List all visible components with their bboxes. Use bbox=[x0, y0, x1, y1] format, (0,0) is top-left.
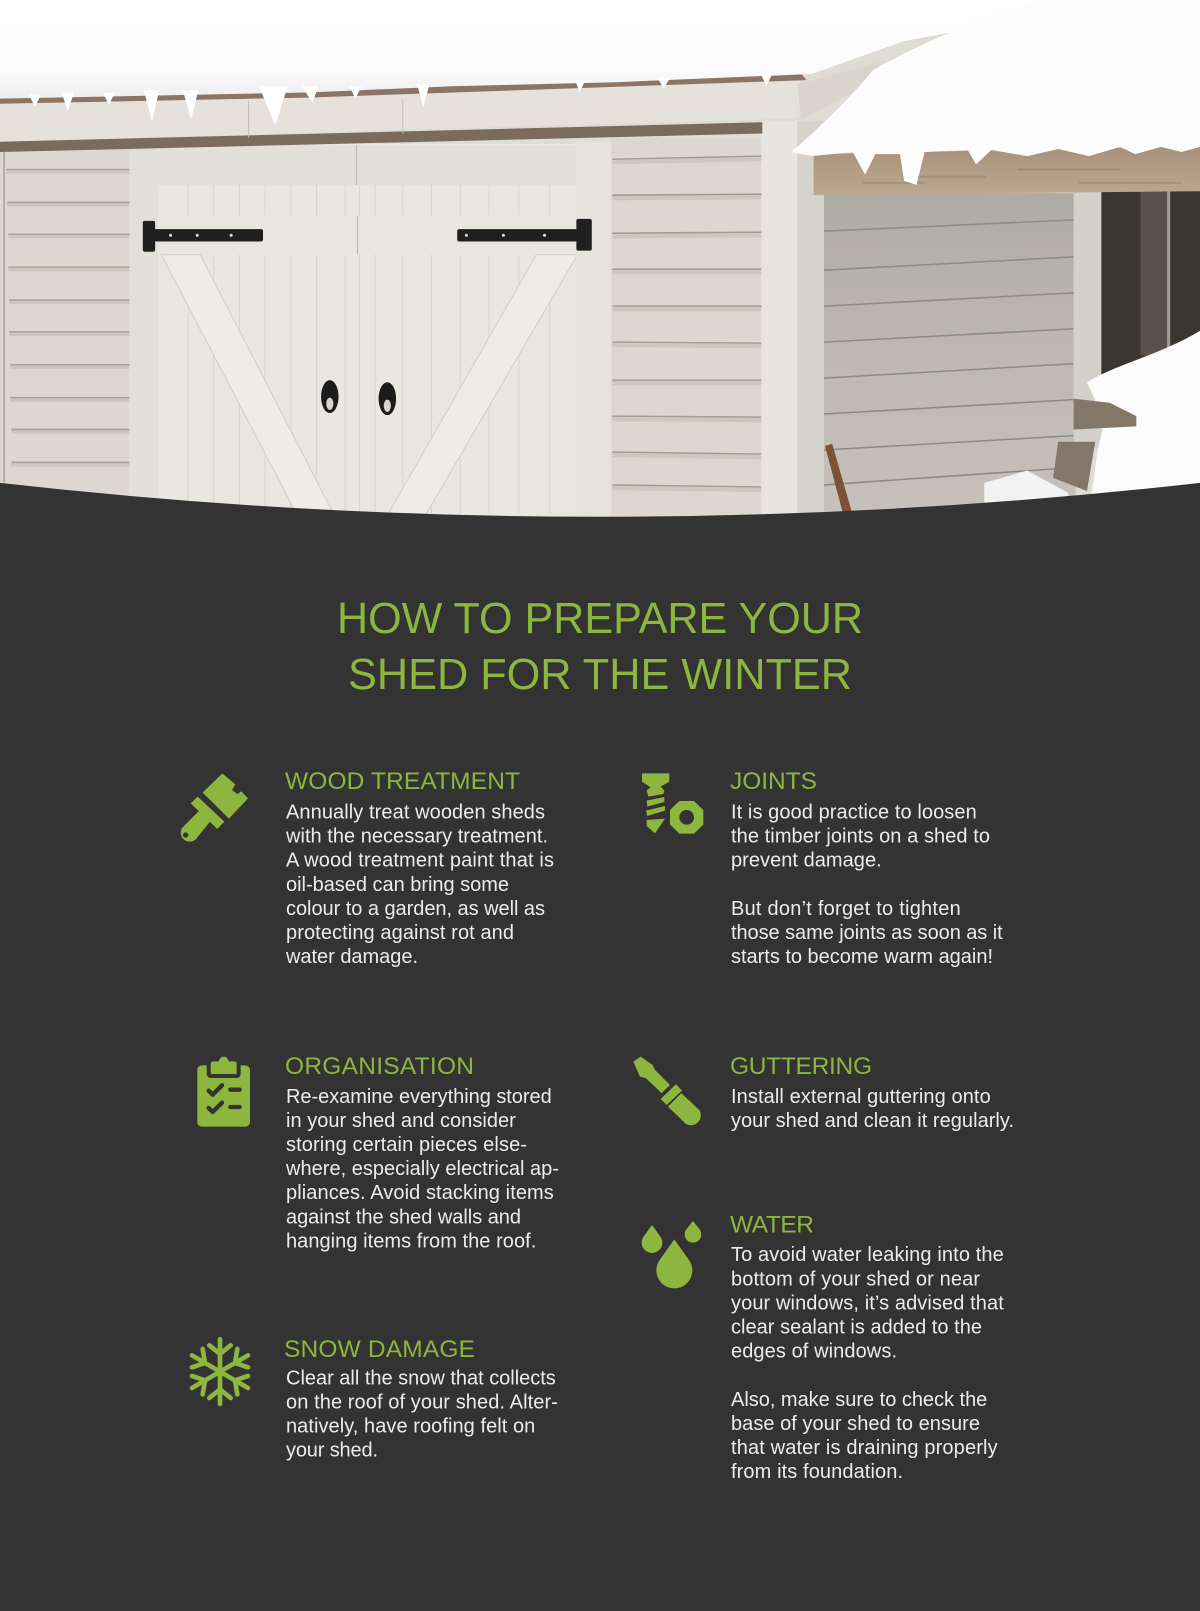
section: joints: It is good practice to loosen bbox=[731, 802, 977, 824]
icon: water drops bbox=[642, 1221, 701, 1288]
section: wood treatment: water damage. bbox=[285, 946, 418, 968]
section: guttering bbox=[730, 1053, 1014, 1132]
section: snow damage bbox=[284, 1336, 558, 1462]
title: SHED FOR THE WINTER bbox=[348, 651, 852, 699]
side wall bbox=[824, 193, 1076, 514]
section: joints: But don’t forget to tighten bbox=[731, 898, 961, 920]
section: organisation: ORGANISATION bbox=[285, 1053, 474, 1080]
section: organisation: pliances. Avoid stacking items bbox=[286, 1182, 554, 1204]
section: wood treatment: Annually treat wooden sheds bbox=[286, 802, 545, 824]
section: snow damage: on the roof of your shed. Alter- bbox=[286, 1392, 558, 1414]
section: water: edges of windows. bbox=[731, 1341, 897, 1363]
front roof snow bbox=[791, 0, 1200, 185]
section: snow damage: Clear all the snow that collects bbox=[286, 1367, 556, 1389]
icon: screw and nut bbox=[642, 773, 703, 834]
dark doorway bbox=[1101, 191, 1200, 397]
snow on ground bbox=[984, 471, 1068, 509]
section: organisation: against the shed walls and bbox=[286, 1206, 521, 1228]
section: water: WATER bbox=[730, 1211, 814, 1238]
icon: paint brush bbox=[181, 773, 248, 842]
side post bbox=[1074, 191, 1101, 448]
left siding bbox=[0, 149, 135, 519]
left door post bbox=[129, 151, 161, 511]
section: water: base of your shed to ensure bbox=[731, 1413, 980, 1435]
section: wood treatment: A wood treatment paint that is bbox=[286, 850, 554, 872]
double doors bbox=[156, 144, 579, 516]
section: joints: those same joints as soon as it bbox=[731, 922, 1003, 944]
section: water bbox=[730, 1211, 1004, 1483]
section: water: your windows, it’s advised that bbox=[731, 1292, 1004, 1314]
section: joints bbox=[730, 768, 1003, 968]
section: water: that water is draining properly bbox=[731, 1437, 998, 1459]
snow pile lower right bbox=[1087, 331, 1200, 514]
stick bbox=[825, 444, 852, 512]
section: organisation: storing certain pieces else- bbox=[286, 1134, 527, 1156]
curved bottom edge bbox=[0, 483, 1200, 534]
icon: clipboard bbox=[197, 1057, 250, 1127]
section: water: To avoid water leaking into the bbox=[731, 1244, 1004, 1266]
section: snow damage: natively, have roofing felt on bbox=[286, 1416, 535, 1438]
photo: snow-covered wooden shed bbox=[0, 0, 1200, 534]
section: wood treatment: WOOD TREATMENT bbox=[285, 768, 520, 795]
section: organisation: hanging items from the roof. bbox=[286, 1230, 536, 1252]
icon: snowflake bbox=[192, 1339, 248, 1404]
door handles bbox=[321, 380, 396, 415]
section: wood treatment: colour to a garden, as well as bbox=[286, 898, 545, 920]
section: snow damage: SNOW DAMAGE bbox=[284, 1336, 475, 1363]
section: guttering: GUTTERING bbox=[730, 1053, 872, 1080]
section: guttering: your shed and clean it regularly. bbox=[731, 1110, 1014, 1132]
section: wood treatment: with the necessary treatment. bbox=[285, 826, 548, 848]
centre siding bbox=[611, 138, 764, 518]
section: organisation: where, especially electrical ap- bbox=[285, 1158, 559, 1180]
section: water: clear sealant is added to the bbox=[731, 1316, 982, 1338]
roof edge bbox=[0, 74, 807, 104]
section: wood treatment: oil-based can bring some bbox=[286, 874, 509, 896]
section: joints: JOINTS bbox=[730, 768, 817, 795]
door post right bbox=[576, 142, 611, 517]
icicles bbox=[29, 73, 773, 125]
section: wood treatment bbox=[285, 768, 554, 968]
section: water: bottom of your shed or near bbox=[731, 1268, 980, 1290]
title: HOW TO PREPARE YOUR bbox=[337, 595, 863, 643]
section: guttering: Install external guttering onto bbox=[731, 1086, 991, 1108]
fascia board bbox=[0, 62, 884, 152]
section: wood treatment: protecting against rot and bbox=[286, 922, 514, 944]
section: water: from its foundation. bbox=[731, 1461, 903, 1483]
front roof beam bbox=[814, 146, 1200, 195]
section: joints: prevent damage. bbox=[731, 850, 882, 872]
section: joints: starts to become warm again! bbox=[731, 946, 993, 968]
section: snow damage: your shed. bbox=[286, 1440, 378, 1462]
title bbox=[337, 595, 863, 699]
section: organisation bbox=[285, 1053, 559, 1252]
stacked logs bbox=[1053, 399, 1136, 491]
section: joints: the timber joints on a shed to bbox=[731, 826, 990, 848]
section: organisation: Re-examine everything stored bbox=[286, 1086, 552, 1108]
icon: screwdriver bbox=[633, 1057, 701, 1125]
corner post bbox=[761, 121, 825, 518]
section: organisation: in your shed and consider bbox=[286, 1110, 516, 1132]
section: water: Also, make sure to check the bbox=[731, 1389, 987, 1411]
hinges bbox=[143, 219, 592, 252]
